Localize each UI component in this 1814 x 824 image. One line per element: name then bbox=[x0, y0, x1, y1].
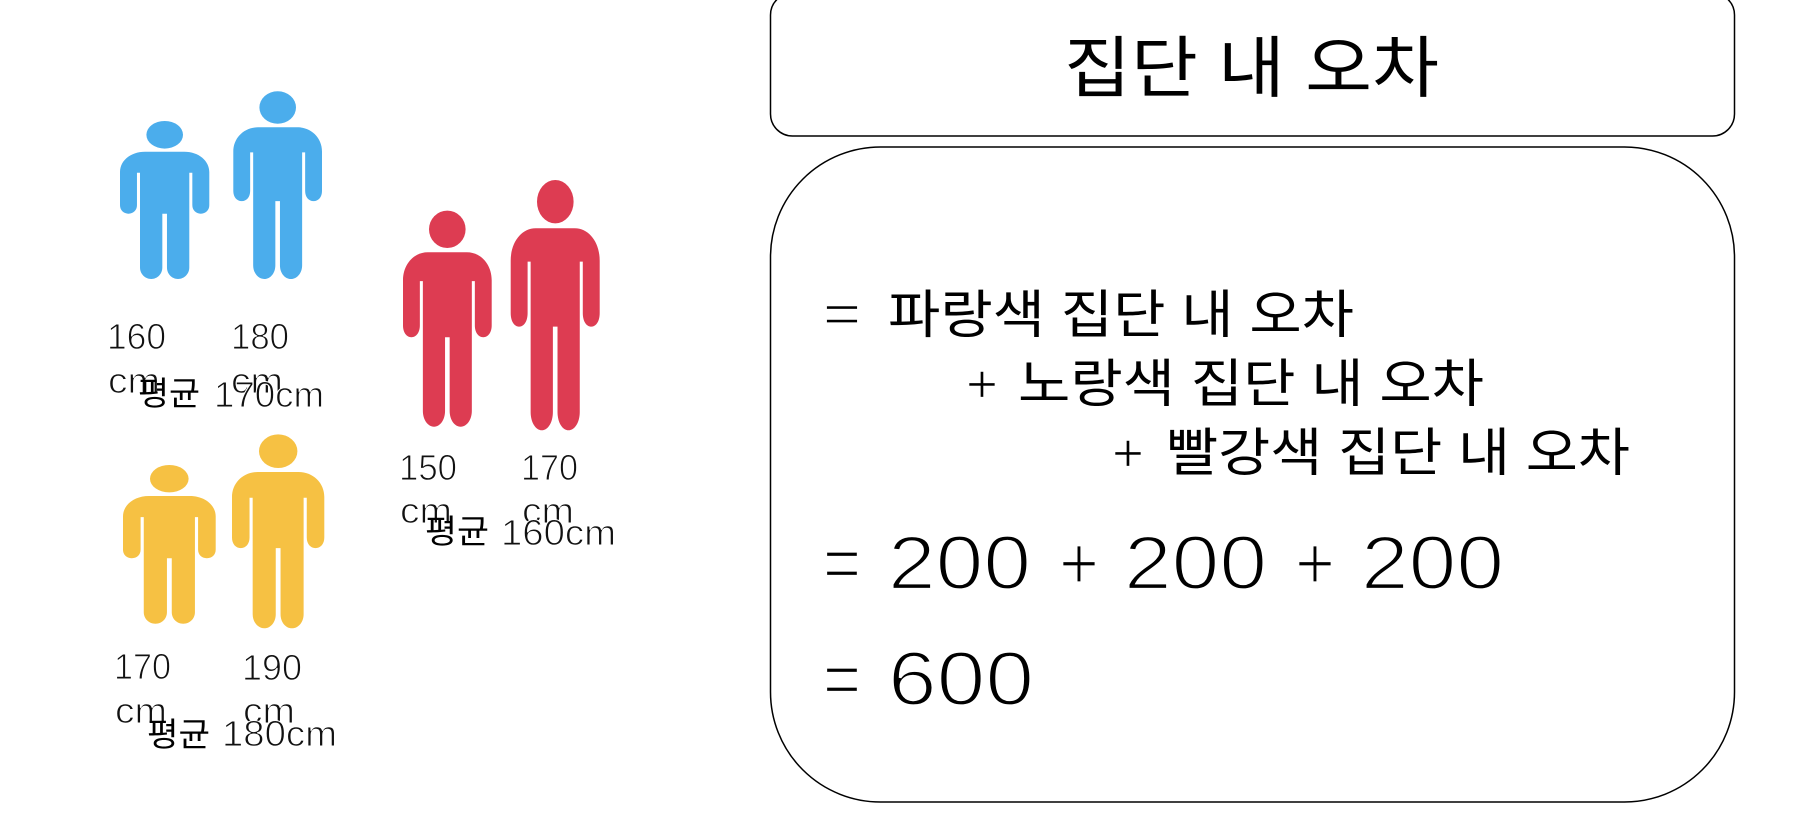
label: 170 cm bbox=[114, 646, 171, 731]
label: yellow average bbox=[147, 713, 337, 754]
icon: blue person 160cm bbox=[120, 121, 209, 279]
label: 160 cm: cm bbox=[108, 360, 160, 401]
panel: calculation box bbox=[770, 147, 1734, 802]
text: 200 + 200 + 200: + bbox=[1059, 521, 1099, 606]
text: 600 bbox=[823, 637, 1034, 722]
icon: yellow person 170cm bbox=[123, 465, 216, 624]
label: 170 cm: cm bbox=[115, 690, 167, 731]
label: blue average bbox=[138, 374, 324, 415]
label: 170 cm: cm bbox=[522, 490, 574, 531]
icon: yellow person 190cm bbox=[232, 434, 324, 628]
text: 600: = bbox=[823, 637, 861, 722]
label: 150 cm: 150 bbox=[399, 447, 457, 488]
yellow group bbox=[114, 434, 337, 754]
icon: red person 170cm bbox=[511, 180, 600, 430]
label: 190 cm: 190 bbox=[242, 647, 302, 688]
text: 600: 600 bbox=[888, 637, 1034, 722]
icon: blue person 180cm bbox=[233, 91, 322, 279]
blue group bbox=[107, 91, 324, 415]
title: 집단 내 오차 bbox=[1064, 32, 1439, 106]
label: 180 cm: 180 bbox=[231, 316, 289, 357]
label: red average bbox=[425, 512, 616, 553]
label: yellow average: 평균 bbox=[147, 716, 210, 753]
label: 190 cm bbox=[242, 647, 302, 731]
text: 200 + 200 + 200: = bbox=[823, 521, 861, 606]
label: 170 cm: 170 bbox=[521, 447, 578, 488]
text: 200 + 200 + 200: 200 bbox=[1124, 521, 1267, 606]
text: 200 + 200 + 200: 200 bbox=[1361, 521, 1504, 606]
text: sum of group errors: = bbox=[823, 284, 861, 344]
text: sum of group errors: + bbox=[966, 354, 998, 414]
label: 150 cm bbox=[399, 447, 457, 531]
label: blue average: 평균 bbox=[138, 375, 200, 412]
label: 160 cm: 160 bbox=[107, 316, 166, 357]
label: 180 cm: cm bbox=[231, 360, 283, 401]
label: yellow average: 180cm bbox=[222, 713, 337, 754]
label: 180 cm bbox=[231, 316, 289, 401]
red group bbox=[399, 180, 616, 553]
label: blue average: 170cm bbox=[214, 374, 324, 415]
text: 200 + 200 + 200: + bbox=[1295, 521, 1335, 606]
panel: title box bbox=[770, 0, 1734, 136]
text: 200 + 200 + 200: 200 bbox=[888, 521, 1031, 606]
icon: red person 150cm bbox=[403, 211, 492, 427]
text: 200 + 200 + 200 bbox=[823, 521, 1504, 606]
text: sum of group errors: 빨강색 집단 내 오차 bbox=[1166, 425, 1630, 483]
label: 170 cm bbox=[521, 447, 578, 531]
label: 190 cm: cm bbox=[243, 690, 295, 731]
label: red average: 160cm bbox=[501, 512, 616, 553]
label: 160 cm bbox=[107, 316, 166, 401]
label: 170 cm: 170 bbox=[114, 646, 171, 687]
text: sum of group errors: 노랑색 집단 내 오차 bbox=[1018, 356, 1484, 414]
text: sum of group errors bbox=[823, 284, 1630, 483]
label: red average: 평균 bbox=[425, 513, 489, 550]
label: 150 cm: cm bbox=[400, 490, 452, 531]
text: sum of group errors: 파랑색 집단 내 오차 bbox=[888, 287, 1354, 345]
text: sum of group errors: + bbox=[1112, 423, 1144, 483]
